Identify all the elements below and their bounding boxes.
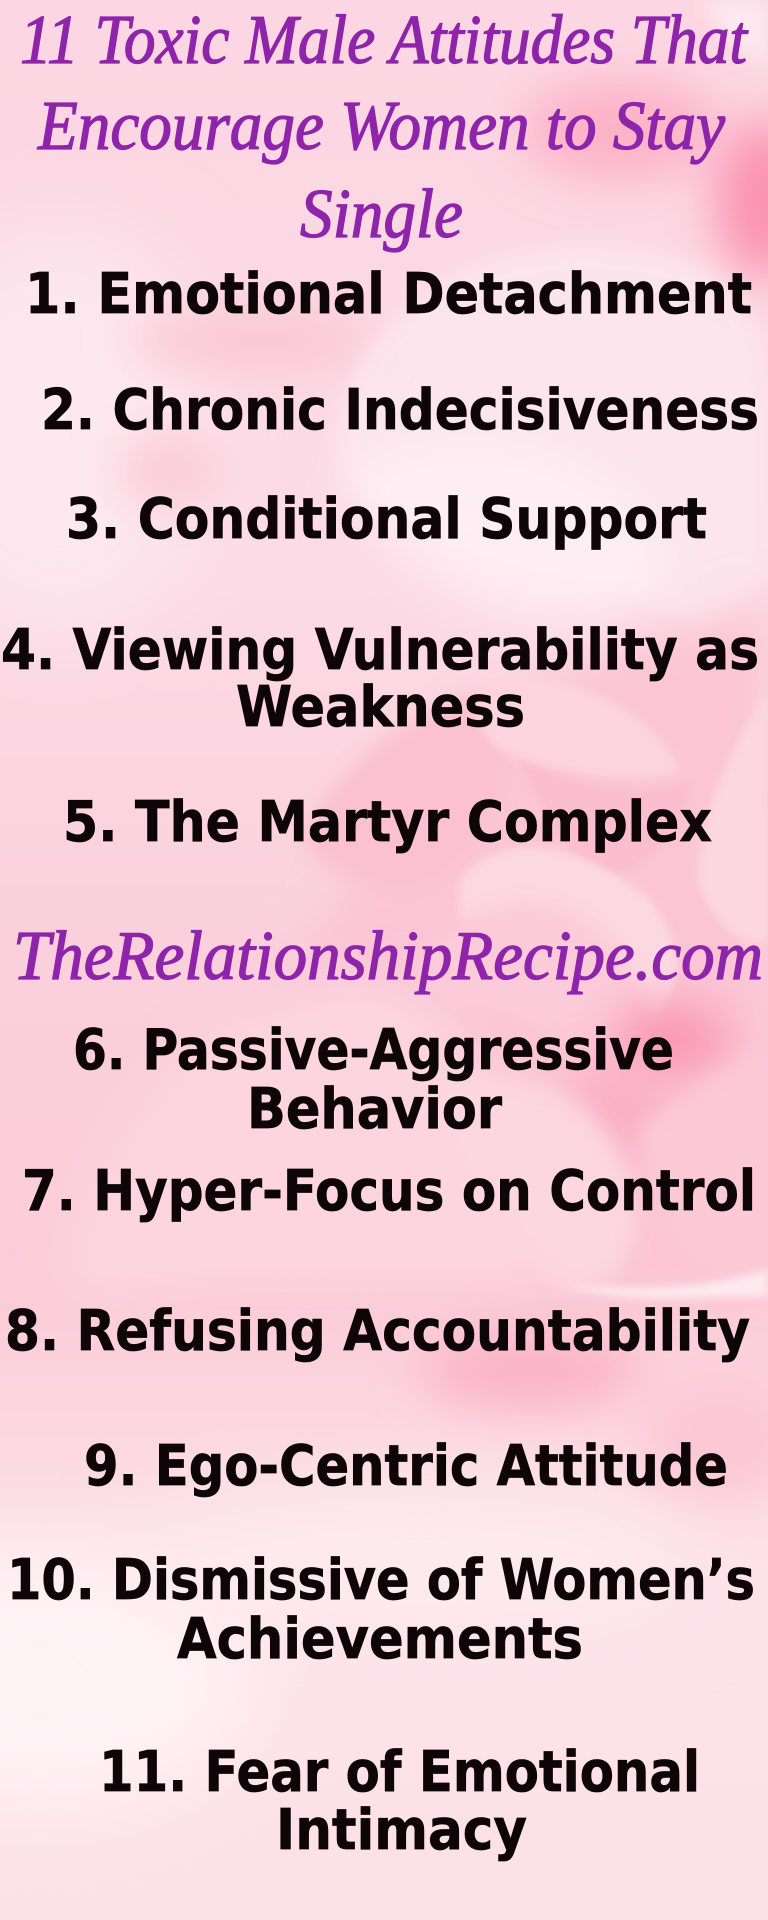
list item 3: 3. Conditional Support [66, 487, 707, 552]
list item 4: Weakness [236, 675, 525, 740]
list item 6: 6. Passive-Aggressive [73, 1018, 674, 1083]
list item 11: 11. Fear of Emotional [99, 1740, 700, 1805]
title: Single [300, 176, 463, 253]
top pink blooms [520, 80, 720, 180]
title: Encourage Women to Stay [37, 88, 726, 165]
list item 10 [7, 1548, 755, 1672]
list item 6 [73, 1018, 674, 1142]
rose body [180, 600, 768, 1303]
list item 11: Intimacy [276, 1798, 527, 1863]
list item 10: Achievements [177, 1607, 583, 1672]
list item 4 [1, 618, 759, 740]
soft light washes [0, 230, 210, 630]
list item 6: Behavior [247, 1077, 502, 1142]
white upper petal [338, 247, 768, 626]
title [20, 2, 748, 253]
list item 11 [99, 1740, 700, 1863]
lower pink blooms [420, 1332, 640, 1408]
list item 5: 5. The Martyr Complex [63, 790, 712, 855]
